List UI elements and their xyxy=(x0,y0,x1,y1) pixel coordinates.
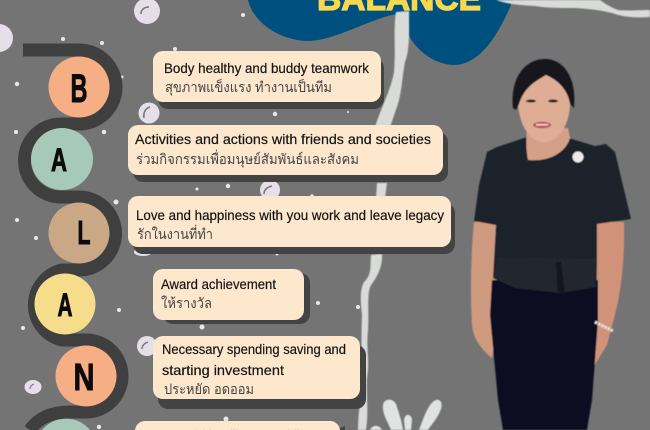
card 5: saving xyxy=(153,336,366,409)
letter circle A: A xyxy=(51,142,67,178)
white dots xyxy=(14,13,360,429)
eyes xyxy=(526,100,558,102)
brooch xyxy=(572,152,584,162)
card 2: activities: ร่วมกิจกรรมเพื่อมนุษย์สัมพันธ์และสังคม xyxy=(136,150,359,168)
bracelet xyxy=(595,322,613,331)
letter circle B: B xyxy=(70,67,88,111)
card 3: love: รักในงานที่ทำ xyxy=(137,225,213,242)
card 3: love: Love and happiness with you work and leave legacy xyxy=(136,207,444,223)
dress top xyxy=(474,136,631,293)
card 3: love xyxy=(128,196,455,254)
letter circle A xyxy=(31,128,93,190)
card 5: saving: starting investment xyxy=(162,362,284,378)
tie xyxy=(556,262,565,294)
decorative bubbles xyxy=(0,0,280,394)
card 2: activities: Activities and actions with friends and societies xyxy=(135,131,431,147)
card 4: award: Award achievement xyxy=(161,276,276,292)
peplum waist band xyxy=(493,257,597,293)
right arm xyxy=(581,222,624,372)
card 5: saving: Necessary spending saving and xyxy=(162,341,346,357)
card 1: body: สุขภาพแข็งแรง ทำงานเป็นทีม xyxy=(165,78,332,96)
torn paper strip: vertical xyxy=(358,11,409,430)
hair xyxy=(513,59,574,110)
letter circle N: N xyxy=(74,357,94,399)
letter circle L xyxy=(48,202,110,264)
letter circle B xyxy=(48,56,110,118)
card 2: activities xyxy=(128,125,448,182)
left arm xyxy=(471,222,497,358)
letter circle A xyxy=(34,274,96,334)
skirt xyxy=(490,280,598,430)
face xyxy=(518,72,570,142)
portrait of woman xyxy=(471,59,631,430)
winding snake path xyxy=(23,50,122,430)
letter circle L: L xyxy=(78,214,90,251)
white hand-shaped plant decoration xyxy=(370,400,442,430)
card 6: partly cropped xyxy=(135,421,345,430)
mouth xyxy=(533,122,551,128)
card 1: body xyxy=(153,51,384,109)
neck xyxy=(526,128,570,160)
letter circle N xyxy=(56,346,116,406)
letter circle A: A xyxy=(58,287,72,323)
card 5: saving: ประหยัด อดออม xyxy=(164,381,254,397)
letter circle C xyxy=(42,419,90,430)
blue title blob xyxy=(248,0,513,65)
torn paper strip: top right xyxy=(496,0,650,17)
card 4: award: ให้รางวัล xyxy=(161,295,212,311)
card 1: body: Body healthy and buddy teamwork xyxy=(164,60,370,76)
card 4: award xyxy=(153,269,310,324)
